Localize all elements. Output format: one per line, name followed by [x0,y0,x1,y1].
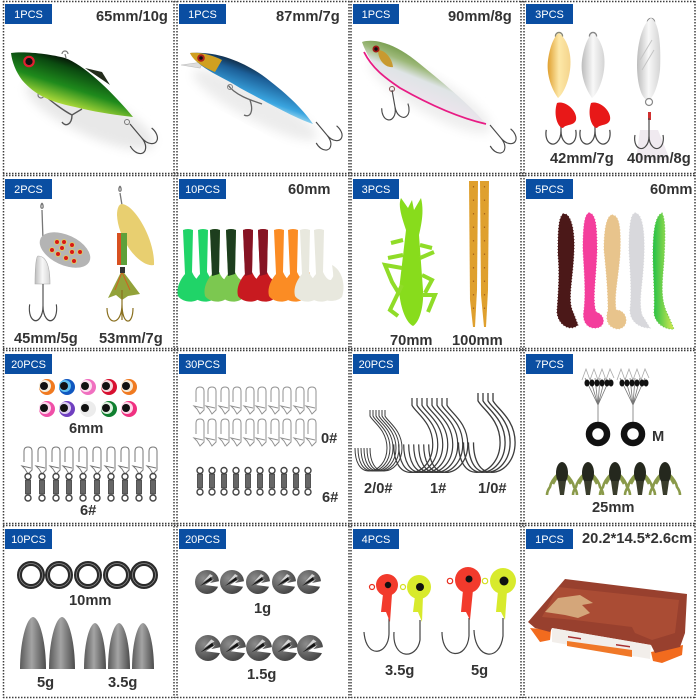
quantity badge: 20PCS [359,359,393,371]
icon: hooks 1/0 [458,393,515,472]
quantity badge [526,4,573,24]
icon: dark red shad [557,214,578,328]
icon: green creature bait [385,198,435,326]
panel: 3PCS spoons [526,4,691,167]
icon: red 3.5g jig [364,574,398,651]
icon: silver spoon [580,32,610,144]
size label: 6mm [69,421,103,437]
icon: green lure [11,51,161,157]
size label: 90mm/8g [448,9,512,25]
icon: green shad [653,213,674,329]
icon: large silver spoon with feather [635,18,670,160]
icon: gold spoon [546,32,576,144]
icon: hooks 2/0 [355,410,402,471]
quantity badge [5,354,52,374]
quantity badge: 30PCS [185,359,220,371]
panel: 7PCS stoppers and crickets [526,354,680,516]
quantity badge: 7PCS [535,359,564,371]
size label: 87mm/7g [276,9,340,25]
panel: 1PCS tackle box [526,529,692,663]
panel: 10PCS rings and bullet sinkers [5,529,156,691]
quantity badge: 3PCS [535,9,564,21]
quantity badge [5,4,52,24]
panel: 1PCS blue minnow [179,4,345,153]
panel: 2PCS spinners [5,179,163,347]
size label: 10mm [69,593,111,609]
panel: 20PCS split shot sinkers [179,529,324,683]
panel: 5PCS paddle tail shads [526,179,692,329]
icon: pencil lure [362,41,519,156]
quantity badge [179,179,226,199]
icon: eye beads [39,379,137,417]
icon: 3.5g bullet sinkers [84,623,154,669]
panel: 1PCS pink silver pencil lure [353,4,519,156]
quantity badge: 10PCS [185,184,220,196]
size label: 20.2*14.5*2.6cm [582,531,692,547]
icon: crickets [547,462,680,495]
quantity badge [353,4,399,24]
icon: 1.5g split shots [195,635,324,661]
size label: 53mm/7g [99,331,163,347]
quantity badge [353,354,399,374]
quantity badge: 20PCS [11,359,46,371]
quantity badge: 10PCS [11,534,46,546]
quantity badge [526,179,573,199]
size label: 40mm/8g [627,151,691,167]
quantity badge: 1PCS [14,9,43,21]
quantity badge [5,179,52,199]
quantity badge: 3PCS [362,184,390,196]
icon: silver spinner [29,203,96,321]
icon: yellow 3.5g jig [394,575,431,654]
shadow [186,59,324,151]
quantity badge [353,179,399,199]
size label: 65mm/10g [96,9,168,25]
icon: snaps two rows [194,387,316,446]
size label: 1# [430,481,446,497]
quantity badge [5,529,52,549]
icon: bead stopper left [582,369,614,443]
icon: hooks 1 [394,398,468,472]
icon: pink shad [583,213,603,328]
quantity badge [179,4,226,24]
quantity badge: 1PCS [362,9,390,21]
panel: 4PCS jig heads [353,529,516,679]
size label: 3.5g [108,675,137,691]
icon: blue lure [181,53,345,153]
panel: 3PCS soft worms [353,179,503,349]
icon: clear gold shad [604,215,626,329]
icon: 1g split shots [195,570,322,594]
chart of grubs [177,229,344,302]
size label: 1g [254,601,271,617]
icon: bead stopper right [617,369,649,443]
size label: 3.5g [385,663,414,679]
icon: red 5g jig [442,567,481,654]
panel: 20PCS beads and snap swivels [5,354,157,519]
icon: black rings [20,564,156,586]
shadow [18,67,162,163]
quantity badge: 4PCS [362,534,390,546]
icon: snap swivels row [22,447,157,501]
quantity badge [526,354,573,374]
panel: 20PCS wide gap hooks [353,354,515,497]
size label: 60mm [288,182,330,198]
quantity badge [526,529,573,549]
size label: 1.5g [247,667,276,683]
quantity badge: 1PCS [188,9,217,21]
icon: amber sticks [469,181,489,327]
size label: 2/0# [364,481,393,497]
size label: 6# [322,490,338,506]
size label: 25mm [592,500,634,516]
size label: 0# [321,431,337,447]
size label: 60mm [650,182,692,198]
size label: 42mm/7g [550,151,614,167]
quantity badge: 5PCS [535,184,564,196]
size label: 45mm/5g [14,331,78,347]
size label: 100mm [452,333,503,349]
panel: 30PCS snaps and swivels [179,354,338,506]
panel: 1PCS green crankbait [5,4,168,163]
shadow [360,44,500,146]
quantity badge: 20PCS [185,534,220,546]
quantity badge: 2PCS [14,184,43,196]
icon: gold spinner with feather [107,186,154,321]
size label: 70mm [390,333,432,349]
quantity badge: 1PCS [535,534,564,546]
panel: 10PCS curly tail grubs [177,179,344,302]
icon: clear silver shad [629,213,650,328]
icon: barrel swivels [197,468,311,495]
icon: yellow 5g jig [474,568,516,654]
size label: M [652,429,664,445]
icon: 5g bullet sinkers [20,617,75,669]
icon: tackle box [528,579,687,663]
quantity badge [179,529,226,549]
quantity badge [179,354,226,374]
size label: 6# [80,503,96,519]
size label: 5g [471,663,488,679]
size label: 1/0# [478,481,507,497]
quantity badge [353,529,399,549]
size label: 5g [37,675,54,691]
